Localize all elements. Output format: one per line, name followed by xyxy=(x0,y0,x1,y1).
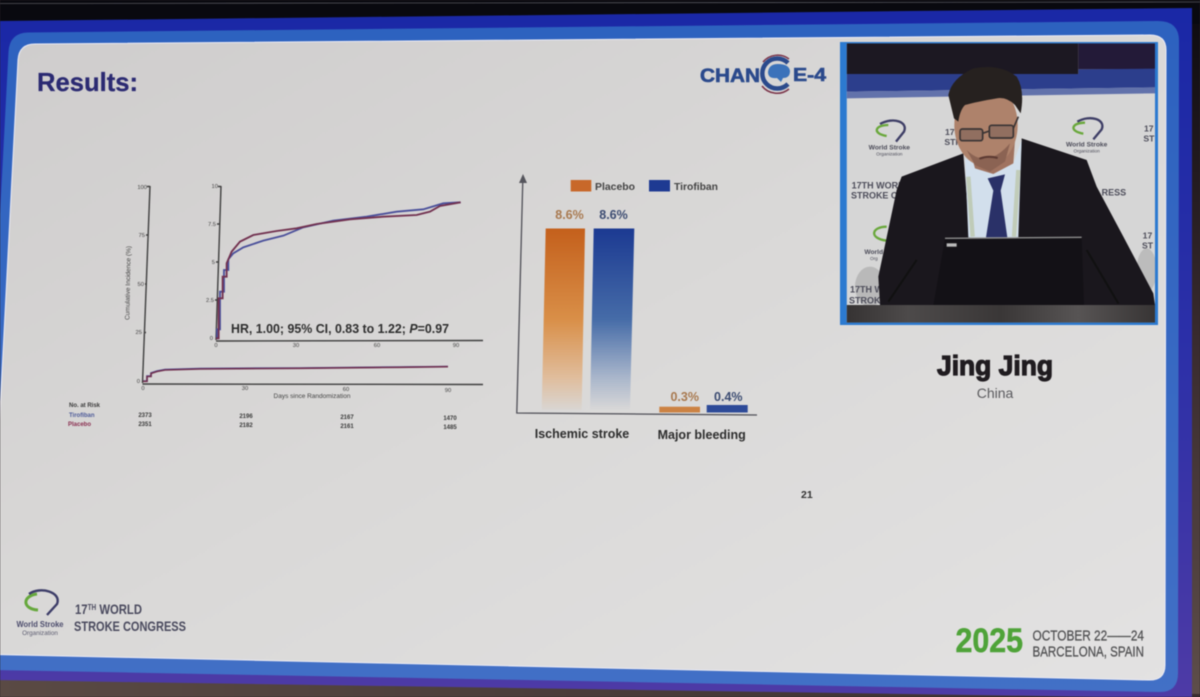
backdrop branding: 17TH WORLD xyxy=(852,180,911,190)
inset x tick labels: 60 xyxy=(374,343,380,349)
footer: date and location xyxy=(1032,628,1144,660)
backdrop branding: 17 xyxy=(1144,124,1154,134)
laptop xyxy=(933,237,1084,305)
value labels: 8.6% xyxy=(555,208,584,222)
table: number at risk: 2373 xyxy=(138,413,152,419)
backdrop branding: NGRE xyxy=(1085,295,1111,305)
backdrop branding: STROKE CO xyxy=(851,190,904,200)
backdrop branding: D xyxy=(1083,284,1090,294)
bar: ischemic stroke tirofiban xyxy=(590,228,634,410)
main x tick labels: 30 xyxy=(242,386,248,392)
legend xyxy=(571,180,718,193)
speaker tie xyxy=(986,174,1007,237)
footer: congress name: TH xyxy=(88,603,96,612)
backdrop branding: World Stroke xyxy=(1066,142,1108,149)
main y tick labels: 0 xyxy=(137,379,140,385)
speaker neck and face xyxy=(970,140,1015,174)
speaker video panel xyxy=(840,42,1158,325)
inset x tick labels: 0 xyxy=(214,343,218,349)
table: number at risk: 2351 xyxy=(138,422,152,428)
chart: cumulative incidence Kaplan-Meier xyxy=(124,184,483,400)
chart: ischemic stroke and major bleeding bars xyxy=(517,174,757,442)
inset x tick labels xyxy=(214,343,459,349)
main x tick labels: 0 xyxy=(141,386,145,392)
table: number at risk: 2196 xyxy=(239,414,253,420)
main y tick labels: 75 xyxy=(139,233,145,239)
footer: date and location: BARCELONA, SPAIN xyxy=(1032,644,1144,660)
footer: congress name: 17 xyxy=(75,601,91,617)
icon: swoosh xyxy=(26,590,58,615)
main curves xyxy=(143,366,448,381)
main x tick labels xyxy=(141,386,451,394)
inset axes xyxy=(215,186,483,341)
inset x tick labels: 90 xyxy=(453,343,459,349)
speaker shirt xyxy=(965,140,1022,237)
category labels xyxy=(535,427,746,442)
inset curves xyxy=(216,202,461,338)
logo: World Stroke Organization: Organization xyxy=(22,630,58,637)
page number: 21 xyxy=(801,489,813,501)
y axis title: Cumulative Incidence (%) xyxy=(124,246,133,320)
main y tick labels xyxy=(136,185,147,385)
backdrop branding: Org xyxy=(870,256,878,261)
category labels: Ischemic stroke xyxy=(535,427,629,441)
backdrop branding: STROKE xyxy=(849,295,886,305)
footer: congress name: WORLD xyxy=(96,601,142,617)
main x tick labels: 90 xyxy=(445,388,451,394)
table: number at risk: 2182 xyxy=(239,423,253,429)
table: number at risk: 2161 xyxy=(340,424,354,430)
inset y tick labels: 0 xyxy=(210,336,213,342)
logo: CHANCE-4: CHAN xyxy=(700,66,760,87)
inset y tick labels: 5 xyxy=(212,260,215,266)
backdrop branding: ST xyxy=(1142,240,1154,250)
speaker hair xyxy=(948,67,1022,122)
bar: ischemic stroke placebo xyxy=(542,228,585,410)
logo: CHANCE-4: E-4 xyxy=(793,65,826,85)
table: number at risk: Placebo xyxy=(68,422,91,428)
main x tick labels: 60 xyxy=(343,387,349,393)
table: number at risk: 2167 xyxy=(340,415,354,421)
organization name: World Stroke xyxy=(16,619,64,629)
value labels xyxy=(555,208,743,404)
bar axes xyxy=(517,180,757,415)
backdrop branding: Organization xyxy=(876,151,903,156)
speaker suit xyxy=(878,138,1155,305)
table: number at risk: 1485 xyxy=(443,425,457,431)
inset y tick labels: 7.5 xyxy=(208,222,216,228)
table: number at risk: 1470 xyxy=(443,416,457,422)
backdrop xyxy=(847,43,1155,323)
legend: Tirofiban xyxy=(674,181,718,193)
value labels: 0.3% xyxy=(670,390,699,404)
footer: congress name: STROKE CONGRESS xyxy=(74,618,186,634)
speaker country: China xyxy=(977,385,1013,401)
bar: major bleeding tirofiban xyxy=(707,405,748,412)
speaker lanyard xyxy=(968,170,1018,237)
backdrop branding: World Stroke xyxy=(869,144,910,151)
logo: CHANCE-4 xyxy=(700,55,826,93)
value labels: 8.6% xyxy=(599,208,628,222)
microphones xyxy=(888,250,1118,303)
table: number at risk: Tirofiban xyxy=(69,413,95,419)
inset y tick labels: 2.5 xyxy=(206,298,214,304)
value labels: 0.4% xyxy=(714,390,743,404)
inset y tick labels: 10 xyxy=(212,184,218,190)
speaker mouth xyxy=(979,157,998,159)
podium xyxy=(847,305,1155,323)
backdrop branding: 17 xyxy=(945,127,955,137)
bar: major bleeding placebo xyxy=(659,407,700,412)
heading: Results: Results: xyxy=(37,67,138,97)
table: number at risk xyxy=(68,403,457,431)
inset x tick labels: 30 xyxy=(293,343,299,349)
main y tick labels: 100 xyxy=(137,185,147,191)
footer: congress name xyxy=(74,601,186,634)
main axes xyxy=(142,186,483,384)
inset y tick labels xyxy=(206,184,218,342)
logo: World Stroke Organization xyxy=(16,590,64,637)
backdrop branding: 17TH WO xyxy=(850,285,890,295)
category labels: Major bleeding xyxy=(658,428,746,442)
footer: date and location: OCTOBER 22——24 xyxy=(1032,628,1144,644)
footer: year: 2025 xyxy=(956,622,1023,660)
speaker glasses xyxy=(960,117,1018,141)
backdrop branding: Organization xyxy=(1073,148,1100,153)
main axis titles: Days since Randomization xyxy=(274,393,351,400)
table: number at risk: No. at Risk xyxy=(69,403,101,409)
main y tick labels: 25 xyxy=(136,330,142,336)
backdrop branding xyxy=(849,118,1157,307)
backdrop branding: 17 xyxy=(1143,230,1152,240)
backdrop branding: World xyxy=(864,249,883,256)
backdrop branding: RESS xyxy=(1102,188,1126,198)
backdrop branding: ST xyxy=(1143,134,1155,144)
speaker name: Jing Jing xyxy=(937,350,1053,381)
main y tick labels: 50 xyxy=(138,282,144,288)
hazard ratio annotation: HR, 1.00; 95% CI, 0.83 to 1.22; P=0.97 xyxy=(231,322,449,336)
legend: Placebo xyxy=(595,181,635,193)
backdrop branding: STR xyxy=(944,137,962,147)
